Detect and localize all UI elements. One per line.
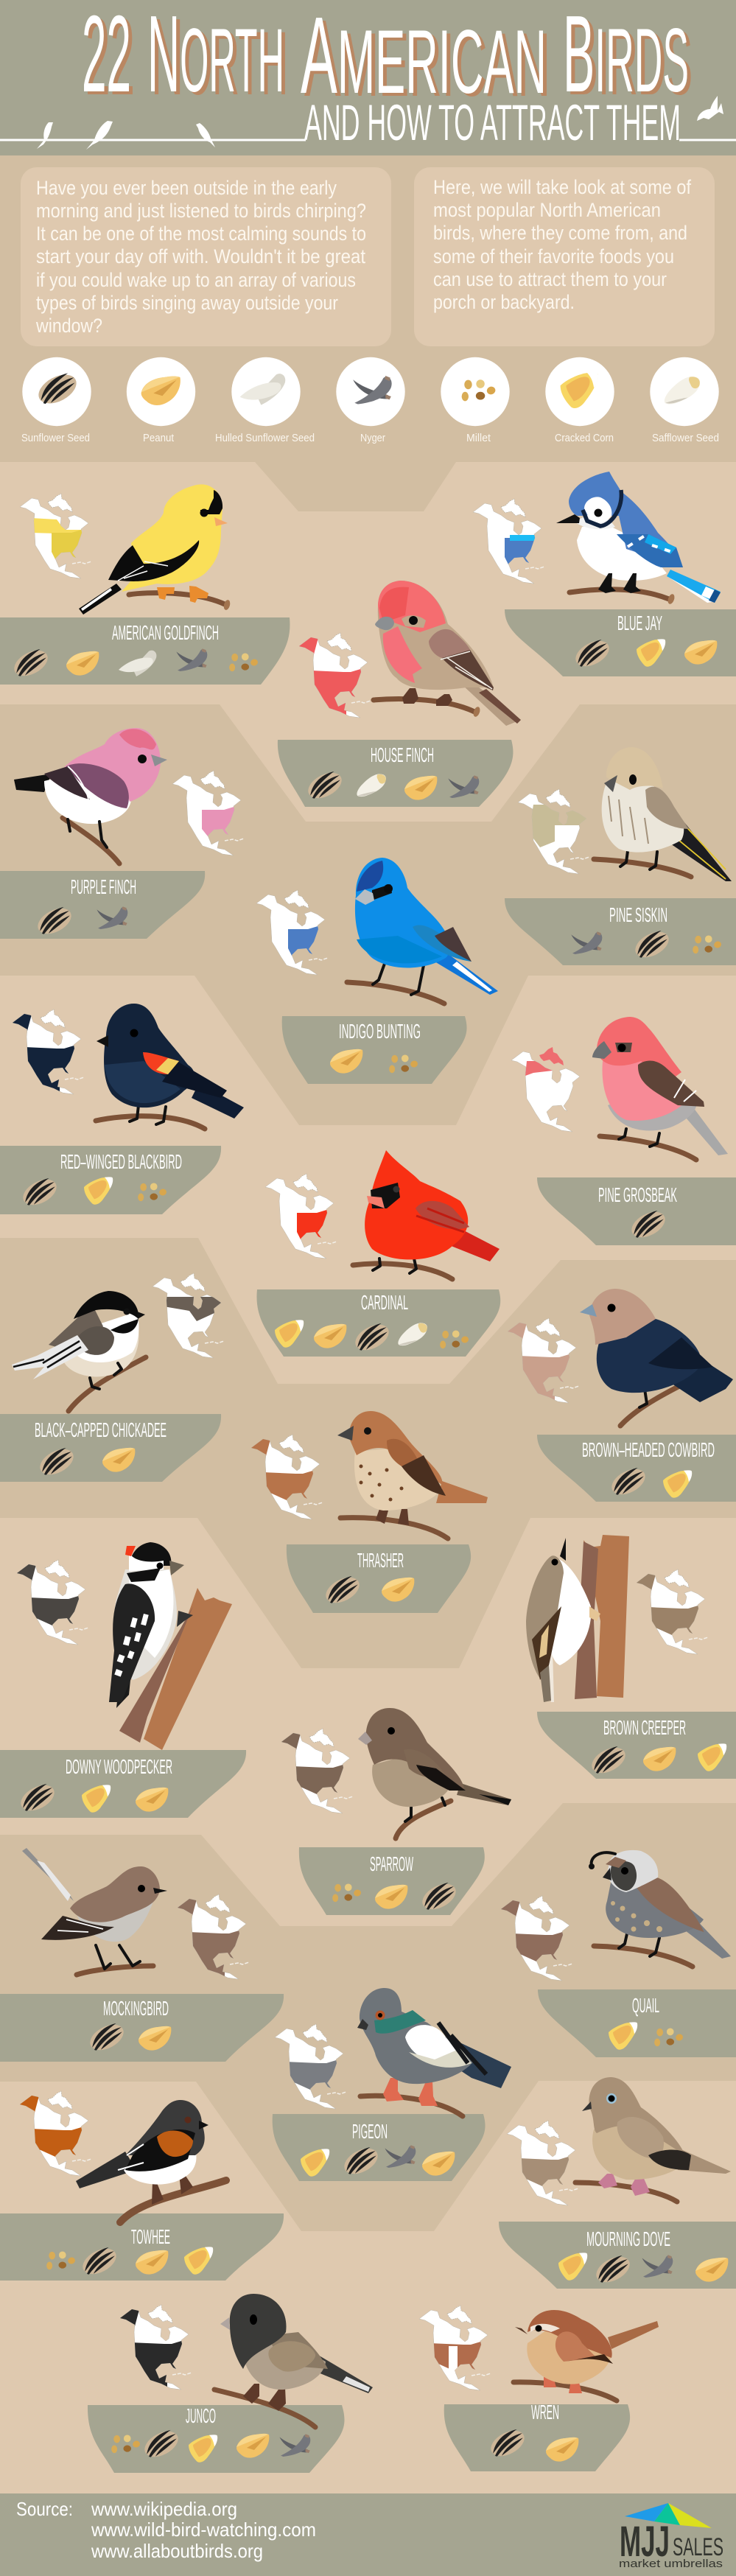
section: Sparrow: SPARROW	[370, 1854, 413, 1876]
section: Black-capped Chickadee	[0, 1273, 224, 1482]
range map	[265, 1174, 337, 1259]
tree trunk	[583, 1535, 629, 1698]
bird: wren	[514, 2310, 659, 2401]
background hexagon bands	[0, 462, 736, 2493]
sources	[16, 2498, 316, 2562]
intro text box right: porch or backyard.	[433, 292, 575, 314]
section: Purple Finch	[0, 728, 244, 939]
section: Pine Grosbeak: PINE GROSBEAK	[598, 1185, 677, 1207]
range map	[508, 1317, 579, 1407]
bird: blue jay	[556, 472, 721, 605]
section: Towhee: TOWHEE	[131, 2227, 170, 2249]
section: Indigo Bunting	[256, 858, 498, 1084]
tree trunk	[144, 1588, 232, 1750]
range map	[419, 2306, 491, 2390]
section: Mourning Dove	[499, 2077, 736, 2289]
section: Mockingbird: MOCKINGBIRD	[103, 1998, 169, 2020]
section: Junco: JUNCO	[186, 2406, 216, 2428]
bird: brown creeper	[526, 1538, 600, 1702]
intro text box left: types of birds singing away outside your	[36, 293, 338, 315]
footer band	[0, 2493, 736, 2576]
range map	[17, 1559, 88, 1645]
section: Quail	[501, 1850, 736, 2057]
range map	[251, 1434, 323, 1519]
range map	[256, 890, 328, 975]
section: Indigo Bunting: INDIGO BUNTING	[339, 1021, 421, 1043]
food legend: Hulled Sunflower Seed	[215, 432, 315, 444]
range map	[20, 494, 91, 578]
section: Blue Jay: BLUE JAY	[617, 613, 662, 635]
section: Towhee	[0, 2090, 284, 2281]
range map	[178, 1894, 249, 1984]
section: Downy Woodpecker: DOWNY WOODPECKER	[66, 1757, 172, 1779]
range map	[20, 2090, 91, 2176]
intro text box left	[21, 167, 391, 346]
bird: sparrow	[358, 1708, 511, 1838]
section: American Goldfinch	[0, 484, 290, 685]
range map	[511, 1047, 582, 1132]
bird: towhee	[76, 2100, 226, 2222]
food legend	[21, 357, 719, 444]
range map	[172, 771, 244, 855]
bird: junco	[214, 2294, 373, 2427]
section: Thrasher: THRASHER	[357, 1550, 404, 1572]
section: Pigeon: PIGEON	[352, 2121, 388, 2143]
section: Brown Creeper	[526, 1535, 736, 1779]
sources: www.wikipedia.org	[91, 2498, 237, 2520]
bird: house finch	[374, 581, 521, 726]
intro text box right: some of their favorite foods you	[433, 246, 674, 268]
section: Cardinal: CARDINAL	[361, 1292, 408, 1315]
section: Sparrow	[281, 1708, 511, 1915]
sources: www.wild-bird-watching.com	[91, 2519, 316, 2541]
food legend: Cracked Corn	[555, 432, 614, 444]
section: Wren: WREN	[531, 2402, 559, 2424]
section: Mourning Dove: MOURNING DOVE	[586, 2229, 670, 2251]
section: Red-winged Blackbird	[0, 1004, 244, 1214]
intro text box left: start your day off with. Wouldn't it be great	[36, 246, 365, 268]
range map	[120, 2304, 192, 2394]
section: Quail: QUAIL	[632, 1995, 659, 2017]
intro text box right: birds, where they come from, and	[433, 223, 687, 245]
section: American Goldfinch: AMERICAN GOLDFINCH	[112, 623, 219, 645]
title	[82, 0, 689, 116]
bird: quail	[589, 1850, 731, 1967]
range map	[299, 632, 371, 722]
intro text box right	[414, 167, 715, 346]
section: Wren	[419, 2306, 659, 2471]
subtitle: AND HOW TO ATTRACT THEM	[304, 94, 681, 151]
wire with perched birds	[0, 96, 736, 150]
range map	[473, 499, 544, 584]
food legend: Sunflower Seed	[21, 432, 90, 444]
bird: purple finch	[14, 728, 167, 864]
section: Mockingbird	[0, 1848, 284, 2062]
range map	[281, 1728, 353, 1813]
bird: downy woodpecker	[109, 1542, 193, 1708]
section: Downy Woodpecker	[0, 1542, 246, 1818]
range map	[275, 2024, 346, 2109]
intro text box right: most popular North American	[433, 200, 661, 222]
range map	[637, 1569, 708, 1654]
intro text box left: if you could wake up to an array of various	[36, 270, 356, 292]
section: Purple Finch: PURPLE FINCH	[71, 877, 136, 899]
bird: pine grosbeak	[592, 1017, 728, 1160]
bird: indigo bunting	[347, 858, 498, 1004]
section: Blue Jay	[473, 472, 736, 676]
range map	[153, 1273, 224, 1358]
section: House Finch	[278, 581, 521, 807]
section: Pine Siskin	[505, 774, 736, 965]
bird: pine siskin	[594, 747, 732, 881]
bird: cardinal	[353, 1150, 500, 1279]
bird: thrasher	[337, 1411, 488, 1539]
bird: red-winged blackbird	[96, 1004, 244, 1129]
section: Pine Siskin: PINE SISKIN	[609, 905, 667, 927]
logo: MJJ Sales	[619, 2503, 723, 2570]
sources: Source:	[16, 2498, 73, 2520]
logo: MJJ Sales: MJJ	[620, 2517, 670, 2566]
food legend: Millet	[466, 432, 491, 444]
range map	[501, 1895, 572, 1981]
intro text box right: Here, we will take look at some of	[433, 177, 691, 199]
section: Thrasher	[251, 1411, 488, 1613]
section: Brown-headed Cowbird	[508, 1289, 736, 1502]
intro text box left: morning and just listened to birds chirping?	[36, 200, 366, 223]
logo: MJJ Sales: market umbrellas	[619, 2558, 723, 2570]
section: Red-winged Blackbird: RED–WINGED BLACKBIRD	[60, 1152, 182, 1174]
bird: mourning dove	[575, 2077, 731, 2202]
section: Pigeon	[273, 1988, 511, 2181]
section: Black-capped Chickadee: BLACK–CAPPED CHICKADEE	[35, 1420, 167, 1442]
section: Pine Grosbeak	[511, 1017, 736, 1245]
range map	[13, 1009, 84, 1099]
section: Cardinal	[256, 1150, 500, 1357]
range map	[507, 2121, 578, 2205]
header band	[0, 0, 736, 155]
intro text box left: Have you ever been outside in the early	[36, 178, 337, 200]
food legend: Peanut	[143, 432, 175, 444]
section: Brown Creeper: BROWN CREEPER	[603, 1718, 686, 1740]
intro text box right: can use to attract them to your	[433, 269, 667, 291]
bird: goldfinch	[79, 484, 231, 615]
bird: chickadee	[12, 1291, 146, 1411]
food legend: Safflower Seed	[652, 432, 719, 444]
intro text box left: window?	[35, 315, 102, 337]
food legend: Nyger	[360, 432, 385, 444]
range map	[518, 789, 589, 874]
section: House Finch: HOUSE FINCH	[371, 745, 434, 767]
section: Junco	[88, 2294, 373, 2473]
intro text box left: It can be one of the most calming sounds to	[36, 223, 366, 245]
bird: mockingbird	[22, 1848, 167, 1975]
bird: pigeon	[357, 1988, 511, 2116]
bird: cowbird	[580, 1289, 733, 1426]
sources: www.allaboutbirds.org	[91, 2540, 263, 2562]
